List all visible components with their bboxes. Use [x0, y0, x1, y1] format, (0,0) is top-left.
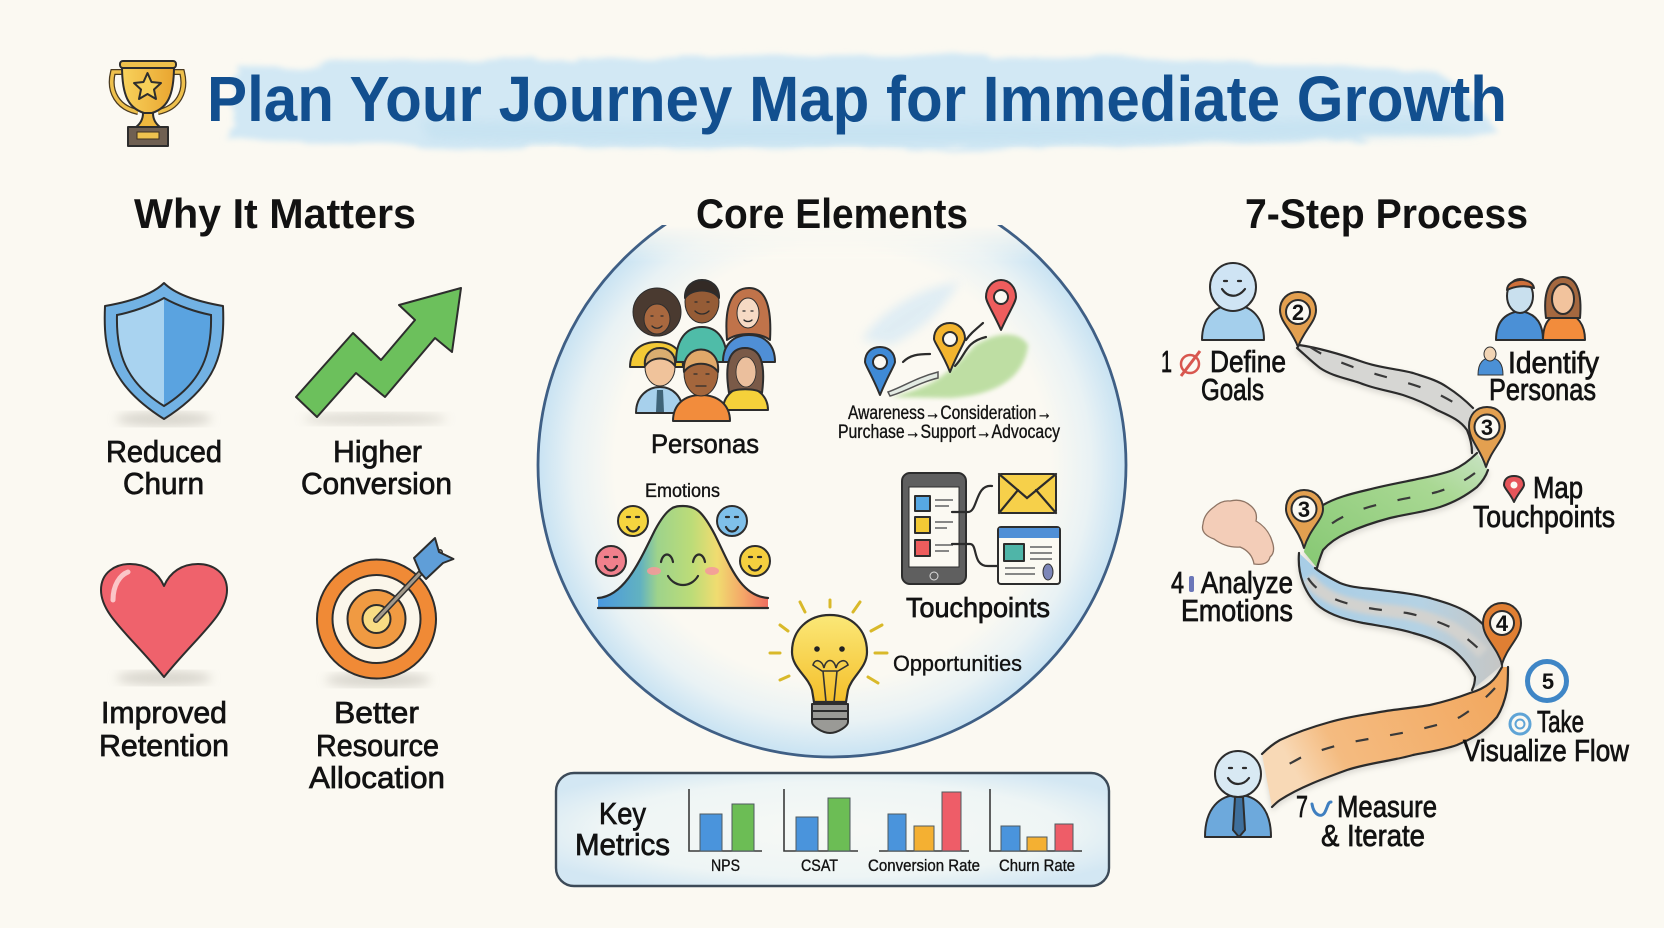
icon: blue swirl [1312, 802, 1331, 815]
label: higher conversion [301, 434, 452, 501]
label: better resource allocation: Resource [316, 728, 439, 763]
pin: 3 upper: 3 [1481, 415, 1493, 440]
label: emotions: Emotions [645, 481, 720, 502]
icon: emotion brain cloud [1202, 500, 1274, 564]
label: reduced churn: Churn [123, 466, 204, 501]
step 5 label: take / visualize flow [1463, 704, 1630, 768]
step 1 label: define goals [1161, 344, 1286, 407]
icon: growth arrow [296, 288, 461, 425]
step 3 label: map touchpoints: Map [1533, 470, 1583, 505]
chart: conversion rate: Conversion Rate [868, 856, 980, 875]
title banner [112, 56, 1507, 149]
chart: churn rate [990, 789, 1082, 875]
icon: goal marker [1181, 351, 1200, 376]
label: journey stages: Awareness→Consideration→ [848, 403, 1052, 424]
icon: trophy [112, 61, 183, 146]
pin: 4 [1483, 603, 1521, 664]
label: journey stages [838, 403, 1060, 443]
pin: 3 lower: 3 [1298, 497, 1310, 522]
panel: why it matters [99, 190, 461, 795]
heading: why it matters: Why It Matters [134, 190, 416, 237]
icon: target [317, 538, 454, 687]
icon: touchpoints devices [902, 473, 1060, 584]
road segment: grey [1297, 345, 1485, 453]
step 2 label: identify personas: Personas [1489, 372, 1596, 407]
step 5 label: take / visualize flow: Take [1537, 704, 1584, 739]
step 7 label: measure and iterate: Measure [1337, 789, 1437, 824]
icon: small persona [1478, 347, 1503, 375]
icon: personas group [630, 280, 775, 421]
badge: 5: 5 [1542, 669, 1554, 694]
pin: 3 lower [1286, 490, 1323, 548]
persona: woman with afro [630, 288, 683, 367]
label: better resource allocation: Better [334, 695, 419, 730]
persona: woman in yellow [723, 348, 768, 410]
label: reduced churn: Reduced [106, 434, 222, 469]
icon: light bulb [770, 600, 887, 733]
label: higher conversion: Higher [333, 434, 422, 469]
icon: small figure [1189, 576, 1194, 592]
label: reduced churn [106, 434, 222, 501]
label: improved retention: Improved [101, 695, 227, 730]
step 3 label: map touchpoints [1473, 470, 1615, 534]
label: key metrics [575, 796, 670, 862]
panel: core elements [538, 173, 1126, 886]
chart: NPS [689, 789, 762, 875]
chart: NPS: NPS [711, 856, 740, 875]
persona: man in teal [676, 280, 727, 362]
chart: churn rate: Churn Rate [999, 856, 1075, 875]
label: improved retention: Retention [99, 728, 229, 763]
label: key metrics: Metrics [575, 827, 670, 862]
label: key metrics: Key [599, 796, 646, 831]
road segment: orange [1262, 667, 1508, 807]
step 4 label: analyze emotions: Analyze [1201, 565, 1293, 600]
label: personas: Personas [651, 429, 759, 459]
label: improved retention [99, 695, 229, 763]
label: higher conversion: Conversion [301, 466, 452, 501]
step 4 label: analyze emotions [1171, 565, 1293, 628]
label: touchpoints: Touchpoints [906, 592, 1050, 623]
icon: person with tie [1205, 751, 1271, 837]
persona: man in orange [673, 350, 730, 421]
pin: 3 upper [1469, 407, 1505, 467]
brush stroke [224, 56, 1498, 149]
step 4 label: analyze emotions: Emotions [1181, 593, 1293, 628]
road: winding path [1262, 345, 1508, 807]
panel: key metrics [556, 773, 1109, 886]
icon: shield [105, 283, 223, 426]
label: journey stages: Purchase→Support→Advocacy [838, 422, 1060, 443]
chart: CSAT [784, 789, 858, 875]
step 2 label: identify personas: Identify [1508, 345, 1599, 380]
chart: conversion rate [868, 792, 980, 875]
step 7 label: measure and iterate [1296, 789, 1437, 853]
pin: 4: 4 [1496, 611, 1509, 636]
icon: persona pair [1496, 277, 1585, 340]
step 1 label: define goals: Define [1210, 344, 1286, 379]
label: better resource allocation [309, 695, 445, 795]
label: opportunities: Opportunities [893, 651, 1022, 676]
step 5 label: take / visualize flow: Visualize Flow [1463, 733, 1630, 768]
step 1 label: define goals: 1 [1161, 344, 1172, 379]
panel: 7-step process [1161, 190, 1630, 853]
step 1 label: define goals: Goals [1201, 372, 1264, 407]
label: better resource allocation: Allocation [309, 760, 445, 795]
chart: emotion curve [596, 506, 770, 608]
step 4 label: analyze emotions: 4 [1171, 565, 1184, 600]
icon: person goals [1202, 263, 1264, 340]
pin: 2: 2 [1292, 300, 1304, 325]
heading: core elements: Core Elements [696, 190, 968, 237]
chart: CSAT: CSAT [801, 856, 838, 875]
step 2 label: identify personas [1478, 345, 1599, 407]
step 7 label: measure and iterate: & Iterate [1321, 818, 1425, 853]
road segment: green [1304, 453, 1488, 568]
step 3 label: map touchpoints: Touchpoints [1473, 499, 1615, 534]
step 7 label: measure and iterate: 7 [1296, 789, 1308, 824]
persona: woman with red hair [723, 288, 775, 362]
icon: journey pins [862, 280, 1028, 398]
icon: red pin [1504, 476, 1524, 502]
road segment: blue [1299, 553, 1502, 690]
heading: title: Plan Your Journey Map for Immediate Growth [207, 63, 1507, 135]
icon: heart [101, 564, 227, 685]
heading: 7-step process: 7-Step Process [1245, 190, 1528, 237]
badge: 5 [1528, 662, 1566, 700]
persona: man with tie [636, 348, 683, 413]
pin: 2 [1280, 292, 1316, 347]
sphere background [538, 173, 1126, 757]
icon: blue ring [1510, 714, 1530, 734]
